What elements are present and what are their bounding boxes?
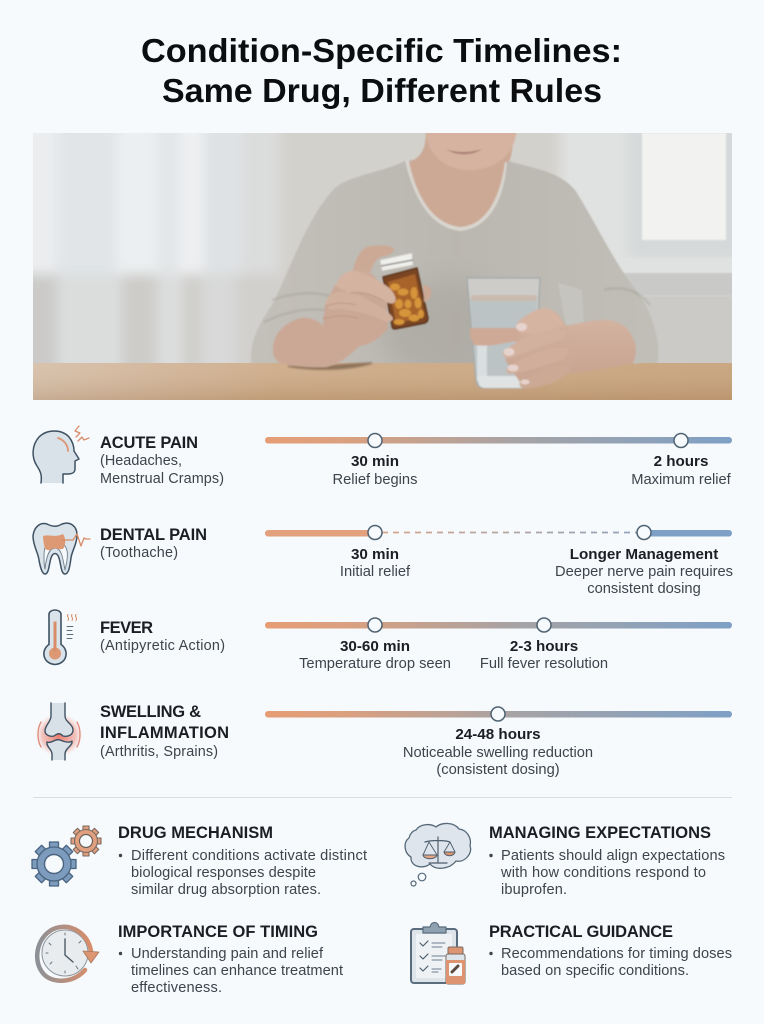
panel: drug mechanism <box>32 824 367 898</box>
label: fever <box>100 619 225 654</box>
row: swelling and inflammation <box>35 703 732 778</box>
text: practical guidance <box>489 923 732 979</box>
label: swelling and inflammation <box>100 703 229 760</box>
glass <box>467 278 540 388</box>
left forearm and hand <box>273 270 388 367</box>
label: dental pain: DENTAL PAIN <box>100 526 207 544</box>
title: Condition-Specific Timelines: <box>141 32 622 69</box>
timeline: swelling: Noticeable swelling reduction <box>403 745 593 761</box>
timeline: dental pain: Longer Management <box>570 546 718 563</box>
timeline: acute pain: Relief begins <box>333 472 417 488</box>
label: acute pain: Menstrual Cramps) <box>100 471 224 487</box>
timeline: dental pain: Initial relief <box>340 564 411 580</box>
panel: practical guidance <box>411 922 732 984</box>
timeline: acute pain: 2 hours <box>654 453 708 470</box>
text: managing expectations: with how conditions respond to <box>500 865 706 881</box>
title: Same Drug, Different Rules <box>162 72 602 109</box>
text: practical guidance: PRACTICAL GUIDANCE <box>489 923 673 941</box>
row: acute pain <box>33 426 732 488</box>
text: importance of timing: effectiveness. <box>131 980 222 996</box>
right forearm and hand <box>566 320 636 373</box>
label: acute pain <box>100 434 224 487</box>
timeline: acute pain: 30 min <box>351 453 399 470</box>
row: dental pain <box>33 523 733 597</box>
timeline: acute pain <box>265 434 732 488</box>
label: swelling and inflammation: SWELLING & <box>100 703 201 721</box>
timeline: fever: 2-3 hours <box>510 638 578 655</box>
icon: clipboard and medicine bottle <box>411 922 465 984</box>
table <box>33 363 732 400</box>
text: drug mechanism: biological responses despite <box>131 865 316 881</box>
icon: thought bubble with scales <box>405 823 471 886</box>
text: drug mechanism <box>118 824 367 898</box>
title <box>141 32 622 109</box>
timeline: fever: Temperature drop seen <box>299 656 451 672</box>
timeline: swelling <box>265 707 732 778</box>
timeline: fever <box>265 618 732 672</box>
timeline: fever: Full fever resolution <box>480 656 608 672</box>
fingers of left hand <box>353 245 394 273</box>
label: swelling and inflammation: INFLAMMATION <box>100 724 229 742</box>
label: dental pain <box>100 526 207 561</box>
text: drug mechanism: similar drug absorption rates. <box>131 882 321 898</box>
label: fever: (Antipyretic Action) <box>100 638 225 654</box>
timeline: acute pain: Maximum relief <box>631 472 732 488</box>
text: importance of timing: IMPORTANCE OF TIMING <box>118 923 318 941</box>
label: fever: FEVER <box>100 619 153 637</box>
text: drug mechanism: DRUG MECHANISM <box>118 824 273 842</box>
text: managing expectations <box>489 824 725 898</box>
label: swelling and inflammation: (Arthritis, Sprains) <box>100 744 218 760</box>
text: importance of timing <box>118 923 343 996</box>
timeline: fever: 30-60 min <box>340 638 410 655</box>
timeline: swelling: (consistent dosing) <box>436 762 560 778</box>
label: acute pain: ACUTE PAIN <box>100 434 198 452</box>
icon: clock with arrow <box>37 927 99 981</box>
pill bottle <box>383 268 428 329</box>
icon: gears <box>32 826 101 886</box>
icon: tooth <box>33 523 90 574</box>
photo: woman holding pill bottle and glass of water <box>33 133 732 400</box>
text: managing expectations: Patients should align expectations <box>501 848 725 864</box>
text: importance of timing: Understanding pain and relief <box>131 946 324 962</box>
text: practical guidance: Recommendations for timing doses <box>501 946 732 962</box>
icon: thermometer <box>44 610 77 664</box>
panel: managing expectations <box>405 823 725 898</box>
text: drug mechanism: Different conditions activate distinct <box>131 848 367 864</box>
icon: head with headache <box>33 426 89 483</box>
text: practical guidance: based on specific conditions. <box>501 963 689 979</box>
timeline: dental pain <box>265 526 733 597</box>
icon: knee joint <box>35 703 83 760</box>
text: managing expectations: MANAGING EXPECTATIONS <box>489 824 711 842</box>
timeline: dental pain: 30 min <box>351 546 399 563</box>
label: dental pain: (Toothache) <box>100 545 178 561</box>
text: importance of timing: timelines can enhance treatment <box>131 963 343 979</box>
timeline: swelling: 24-48 hours <box>455 726 541 743</box>
timeline: dental pain: Deeper nerve pain requires <box>555 564 733 580</box>
panel: importance of timing <box>37 923 343 996</box>
row: fever <box>44 610 732 672</box>
text: managing expectations: ibuprofen. <box>501 882 567 898</box>
label: acute pain: (Headaches, <box>100 453 182 469</box>
timeline: dental pain: consistent dosing <box>587 581 701 597</box>
